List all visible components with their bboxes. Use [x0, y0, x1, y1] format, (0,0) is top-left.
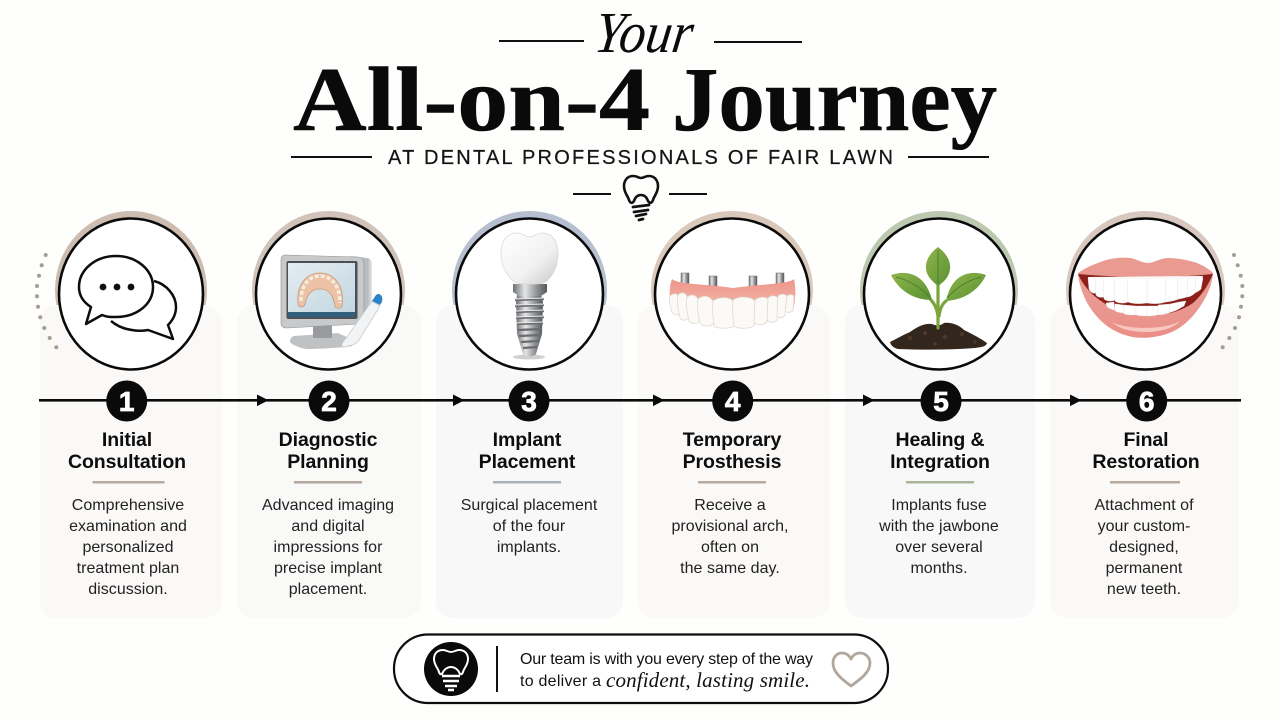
step 6 ring	[1066, 211, 1225, 370]
icon: chat bubbles	[79, 256, 176, 339]
decorative dots: left	[35, 253, 58, 349]
step 4 heading: Temporary	[683, 429, 781, 451]
step 2 text: impressions for	[274, 539, 383, 556]
step 4 text: the same day.	[680, 560, 780, 577]
number badge 1: 1	[119, 386, 134, 417]
closing message text: confident, lasting smile.	[606, 668, 810, 692]
step 4 text: often on	[701, 539, 759, 556]
icon: dental implant	[501, 233, 558, 360]
number badge 6: 6	[1139, 386, 1154, 417]
step 5 text: over several	[895, 539, 983, 556]
number badge 2	[308, 380, 350, 422]
step 1 text: personalized	[82, 539, 174, 556]
closing message text: to deliver a	[520, 673, 601, 690]
step 5 text: Implants fuse	[891, 497, 987, 514]
step 1 panel	[55, 211, 207, 594]
step 2 text: placement.	[289, 581, 367, 598]
step 2 panel	[252, 211, 405, 598]
closing message pill	[394, 634, 888, 703]
step 6 text: new teeth.	[1107, 581, 1181, 598]
number badge 4	[712, 380, 753, 422]
number badge 1	[106, 380, 147, 422]
step 4 ring	[651, 211, 813, 370]
icon: tooth implant small	[624, 176, 658, 220]
icon: smile	[1078, 258, 1213, 338]
step 5 text: months.	[910, 560, 968, 577]
icon: scanner monitor	[281, 255, 382, 349]
subtitle: AT DENTAL PROFESSIONALS OF FAIR LAWN	[388, 147, 893, 169]
step 2 text: precise implant	[274, 560, 383, 577]
step 5 panel	[860, 211, 1018, 573]
step 6 text: designed,	[1109, 539, 1179, 556]
step 6 text: permanent	[1106, 560, 1183, 577]
step 6 panel	[1066, 211, 1225, 594]
step 1 text: discussion.	[88, 581, 168, 598]
step 4 panel	[651, 211, 813, 576]
main heading	[293, 49, 997, 150]
main heading: Journey	[672, 49, 997, 150]
step 3 text: implants.	[497, 539, 561, 556]
step 5 heading: Integration	[890, 451, 990, 473]
step 3 panel	[452, 211, 607, 556]
step 2 text: and digital	[291, 518, 365, 535]
number badge 3: 3	[521, 386, 537, 417]
decorative dots: right	[1221, 253, 1244, 349]
number badge 2: 2	[321, 386, 337, 417]
step 3 text: of the four	[493, 518, 566, 535]
step 3 heading: Implant	[493, 429, 562, 451]
title block	[291, 0, 997, 195]
step 3 text: Surgical placement	[461, 497, 598, 514]
step 4 text: provisional arch,	[671, 518, 789, 535]
icon: full-arch prosthesis	[670, 273, 795, 328]
step 2 heading: Diagnostic	[279, 429, 378, 451]
number badge 6	[1126, 380, 1167, 422]
script word: Your: Your	[591, 0, 698, 65]
step 1 ring	[55, 211, 207, 370]
icon: sprout in soil	[890, 247, 987, 350]
step 6 heading: Final	[1123, 429, 1169, 451]
closing message text	[520, 651, 813, 692]
icon: heart	[833, 653, 870, 686]
step 4 text: Receive a	[694, 497, 766, 514]
step 1 heading: Consultation	[68, 451, 186, 473]
number badge 4: 4	[725, 386, 741, 417]
step 4 heading: Prosthesis	[683, 451, 782, 473]
step 1 text: treatment plan	[77, 560, 179, 577]
step 2 ring	[252, 211, 405, 370]
step 5 heading: Healing &	[895, 429, 985, 451]
step 6 heading: Restoration	[1092, 451, 1200, 473]
number badge 5	[920, 380, 962, 422]
step 5 ring	[860, 211, 1018, 370]
closing message text: Our team is with you every step of the way	[520, 651, 813, 668]
step 6 text: your custom-	[1098, 518, 1190, 535]
step 2 text: Advanced imaging	[262, 497, 394, 514]
step 1 text: Comprehensive	[72, 497, 184, 514]
main heading: All-on-4	[293, 49, 650, 150]
step 1 heading: Initial	[102, 429, 152, 451]
step 6 text: Attachment of	[1094, 497, 1194, 514]
step 5 text: with the jawbone	[878, 518, 999, 535]
number badge 3	[508, 380, 550, 422]
step 2 heading: Planning	[287, 451, 369, 473]
timeline arrow line	[39, 394, 1241, 406]
number badge 5: 5	[933, 386, 949, 417]
step 3 heading: Placement	[479, 451, 576, 473]
step 1 text: examination and	[69, 518, 187, 535]
step 3 ring	[452, 211, 607, 370]
icon: implant badge	[424, 642, 478, 696]
